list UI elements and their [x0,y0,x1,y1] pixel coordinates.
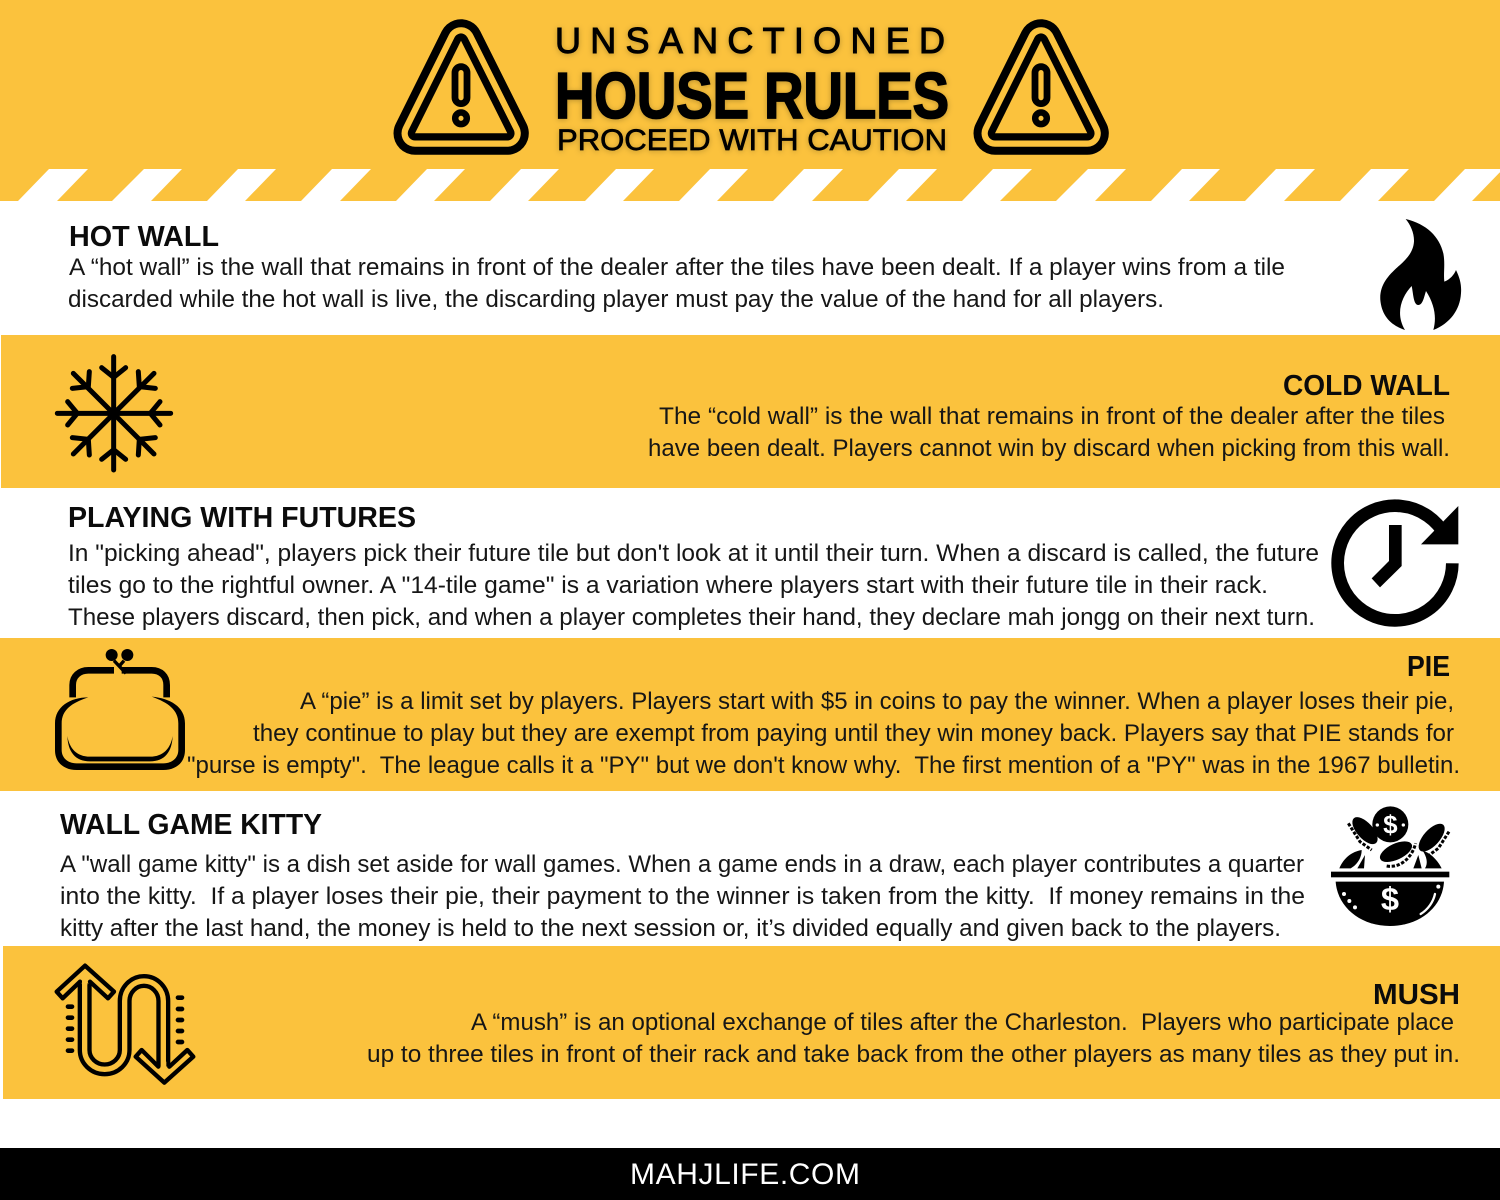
text: playing with futures [68,540,1319,631]
text: cold wall [648,403,1450,462]
text: playing with futures: In "picking ahead", players pick their future tile but don't look at it until their turn. When a discard is called, the future [68,540,1319,567]
text: wall game kitty: into the kitty. If a player loses their pie, their payment to the winner is taken from the kitty. If money remains in the [60,883,1305,910]
text: wall game kitty: kitty after the last hand, the money is held to the next session or, it’s divided equally and given back to the players. [60,915,1281,942]
caution stripes [18,169,1500,201]
header banner [0,0,1500,201]
footer [0,1148,1500,1200]
icon: flame [1380,219,1461,330]
text: pie [187,688,1460,779]
text: wall game kitty: A "wall game kitty" is a dish set aside for wall games. When a game ends in a draw, each player contributes a quarter [60,851,1304,878]
panel: pie [0,638,1500,791]
icon: warning triangle right [995,41,1087,133]
title [555,20,949,157]
text: mush: up to three tiles in front of their rack and take back from the other players as many tiles as they put in. [367,1041,1460,1068]
icon: up and down arrows [57,966,193,1083]
heading: pie: PIE [1407,651,1450,683]
text: mush [367,1009,1460,1068]
heading: mush: MUSH [1373,979,1460,1011]
text: hot wall [68,254,1285,313]
heading: cold wall: COLD WALL [1283,370,1450,402]
text: playing with futures: These players discard, then pick, and when a player completes their hand, they declare mah jongg on their next turn. [68,604,1315,631]
text: pie: they continue to play but they are exempt from paying until they win money back. Players say that PIE stands for [253,720,1454,747]
panel: wall game kitty [0,791,1500,946]
icon: coin purse [55,649,185,770]
text: pie: A “pie” is a limit set by players. Players start with $5 in coins to pay the winner. When a player loses their pie, [300,688,1454,715]
panel: playing with futures [0,488,1500,638]
heading: playing with futures: PLAYING WITH FUTURES [68,502,416,534]
icon: snowflake [57,357,171,470]
icon: clock with arrow [1338,506,1458,620]
text: wall game kitty [60,851,1305,942]
text: hot wall: A “hot wall” is the wall that remains in front of the dealer after the tiles have been dealt. If a player wins from a tile [69,254,1285,281]
heading: hot wall: HOT WALL [69,221,219,253]
footer text: MAHJLIFE.COM [630,1158,860,1191]
title: PROCEED WITH CAUTION [557,124,947,157]
heading: wall game kitty: WALL GAME KITTY [60,809,322,841]
text: playing with futures: tiles go to the rightful owner. A "14-tile game" is a variation where players start with their future tile in their rack. [68,572,1268,599]
text: pie: "purse is empty". The league calls it a "PY" but we don't know why. The first mention of a "PY" was in the 1967 bulletin. [187,752,1460,779]
text: cold wall: The “cold wall” is the wall that remains in front of the dealer after the tiles [659,403,1445,430]
icon: bowl of coins: $ [1381,880,1399,917]
text: mush: A “mush” is an optional exchange of tiles after the Charleston. Players who participate place [471,1009,1454,1036]
text: hot wall: discarded while the hot wall is live, the discarding player must pay the value of the hand for all players. [68,286,1164,313]
panel: mush [3,946,1500,1099]
text: cold wall: have been dealt. Players cannot win by discard when picking from this wall. [648,435,1450,462]
panel: cold wall [1,335,1500,488]
title: HOUSE RULES [555,59,949,132]
panel: hot wall [0,201,1500,335]
icon: bowl of coins: $ [1383,809,1398,839]
title: UNSANCTIONED [555,20,945,61]
icon: warning triangle left [415,41,507,133]
icon: bowl of coins [1331,806,1449,926]
